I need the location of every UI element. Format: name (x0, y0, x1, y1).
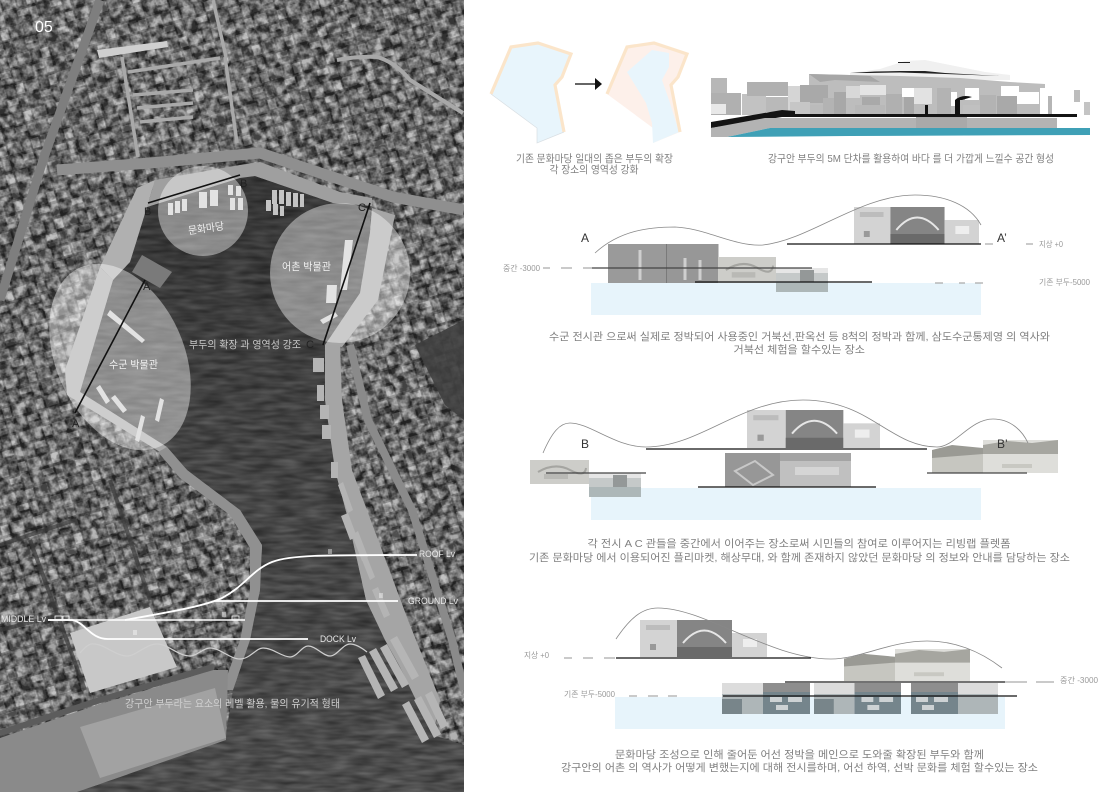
section A-A': A’ (997, 231, 1007, 245)
black road band (711, 110, 1077, 128)
background houses (809, 74, 1045, 114)
caption: pier expansion: 각 장소의 영역성 강화 (550, 164, 639, 176)
north beach (147, 162, 372, 207)
highlight ellipse: 수군 박물관 (49, 264, 191, 450)
highlight circle: 어촌 박물관 (270, 203, 410, 343)
section curve (616, 608, 1002, 668)
level label: middle: MIDDLE Lv (1, 614, 46, 624)
left quay (100, 180, 155, 280)
section letters: A (143, 281, 151, 293)
level label: roof: ROOF Lv (419, 549, 455, 559)
moored boats right bank (313, 358, 390, 618)
diagram: expanded pier outline (607, 43, 687, 143)
tick marks (55, 549, 382, 635)
sea (727, 128, 1090, 137)
dark tree area (415, 320, 464, 420)
diagonal road (0, 0, 100, 300)
section C-C': 중간 -3000 (1060, 675, 1099, 685)
upper light block (97, 41, 168, 58)
land texture (0, 0, 464, 792)
section B-B' (530, 400, 1058, 520)
naval quay white strip (65, 267, 167, 452)
label: 어촌 박물관: 어촌 박물관 (282, 261, 331, 273)
lower streets (0, 480, 150, 690)
highlight circle: 문화마당 (158, 166, 248, 256)
section A-A': 지상 +0 (1039, 239, 1063, 249)
caption: section A (549, 331, 1050, 356)
caption: section A: 거북선 체험을 할수있는 장소 (734, 344, 865, 356)
caption: 5M level: 강구안 부두의 5M 단차를 활용하여 바다 를 더 가깝게 느낄수 공간 형성 (768, 152, 1054, 165)
3D city model (711, 60, 1090, 137)
floor lines (646, 449, 927, 487)
page number: 05 (35, 19, 53, 36)
section line A (75, 280, 145, 413)
label: 부두의 확장: 부두의 확장 과 영역성 강조 (189, 338, 301, 351)
section letters: B (240, 178, 247, 190)
exhibition photos (530, 410, 1058, 497)
water wave line (80, 644, 367, 659)
dock level line (48, 620, 308, 639)
boats inside circles (96, 185, 353, 442)
main road (57, 153, 464, 210)
middle level line (48, 619, 245, 621)
floor lines (695, 244, 981, 282)
cross-section lines (75, 175, 370, 413)
lane streets (122, 0, 237, 157)
caption: section B: 기존 문화마당 에서 이용되어진 플리마켓, 해상무대, 와 함께 존재하지 않았던 문화마당 의 정보와 안내를 담당하는 장소 (529, 551, 1070, 564)
dashes (564, 658, 1054, 696)
water block (591, 283, 981, 315)
section line B (148, 175, 240, 203)
caption: pier expansion: 기존 문화마당 일대의 좁은 부두의 확장 (516, 152, 673, 165)
level label: ground: GROUND Lv (408, 596, 458, 606)
level line diagram (48, 549, 417, 659)
section letters (72, 178, 366, 430)
plaza (70, 607, 177, 693)
caption: section B (529, 538, 1070, 564)
section letters: A (581, 231, 589, 245)
moored boats north (266, 190, 304, 216)
lower pier (0, 670, 228, 792)
floor lines (616, 658, 1017, 696)
section letters: C (358, 202, 366, 214)
section letters: B (144, 206, 151, 218)
caption: section C (561, 748, 1038, 774)
quay wall (711, 118, 1057, 137)
section letters: B (581, 437, 589, 451)
caption: pier expansion (516, 152, 673, 176)
label: 문화마당: 문화마당 (187, 220, 225, 237)
level labels: 지상 +0 (524, 650, 550, 660)
land tone (0, 0, 464, 792)
caption: section A: 수군 전시관 으로써 실제로 정박되어 사용중인 거북선,판옥선 등 8척의 정박과 함께, 삼도수군통제영 의 역사와 (549, 331, 1050, 343)
hill (850, 60, 1010, 80)
caption: section C: 강구안의 어촌 의 역사가 어떻게 변했는지에 대해 전시를하며, 어선 하역, 선박 문화를 체험 할수있는 장소 (561, 761, 1038, 774)
section letters: A (72, 418, 80, 430)
level label: dock: DOCK Lv (320, 634, 356, 644)
buildings (711, 78, 1090, 116)
section C-C': 기존 부두-5000 (564, 690, 616, 699)
aerial photo panel (0, 0, 464, 792)
hill road (337, 57, 463, 113)
dashes (543, 244, 1033, 283)
arrow (575, 78, 602, 90)
section line C (323, 203, 370, 345)
label: 수군 박물관: 수군 박물관 (109, 359, 158, 371)
land base: city blocks (0, 0, 464, 792)
section curve (595, 195, 981, 253)
section A-A' (503, 195, 1091, 315)
C quay (325, 208, 395, 347)
level labels: 중간 -3000 (503, 263, 541, 273)
water block (591, 488, 981, 520)
water of the harbour (78, 176, 464, 792)
diagram: existing pier outline (491, 43, 571, 143)
section letters: C (306, 339, 314, 351)
section curve (543, 400, 1028, 453)
caption: section C: 문화마당 조성으로 인해 줄어둔 어선 정박을 메인으로 도와줄 확장된 부두와 함께 (615, 748, 984, 761)
right road (350, 345, 464, 690)
moored boats south-east (358, 636, 448, 743)
right quay (325, 345, 440, 735)
caption: section B: 각 전시 A C 관들을 중간에서 이어주는 장소로써 시민들의 참여로 이루어지는 리빙랩 플렛폼 (588, 538, 1011, 550)
left lower embankment (158, 447, 262, 690)
ground level line (215, 600, 398, 602)
section B-B': B’ (997, 437, 1008, 451)
section A-A': 기존 부두-5000 (1039, 278, 1091, 287)
aerial caption: 강구안 부두라는 요소의 레벨 활용, 물의 유기적 형태 (125, 697, 340, 710)
exhibition photos (640, 620, 998, 714)
exhibition photos (608, 207, 979, 292)
water block (615, 697, 1005, 729)
roof level line (125, 555, 417, 620)
pavilion at the quay (132, 255, 172, 288)
section C-C' (524, 608, 1099, 729)
